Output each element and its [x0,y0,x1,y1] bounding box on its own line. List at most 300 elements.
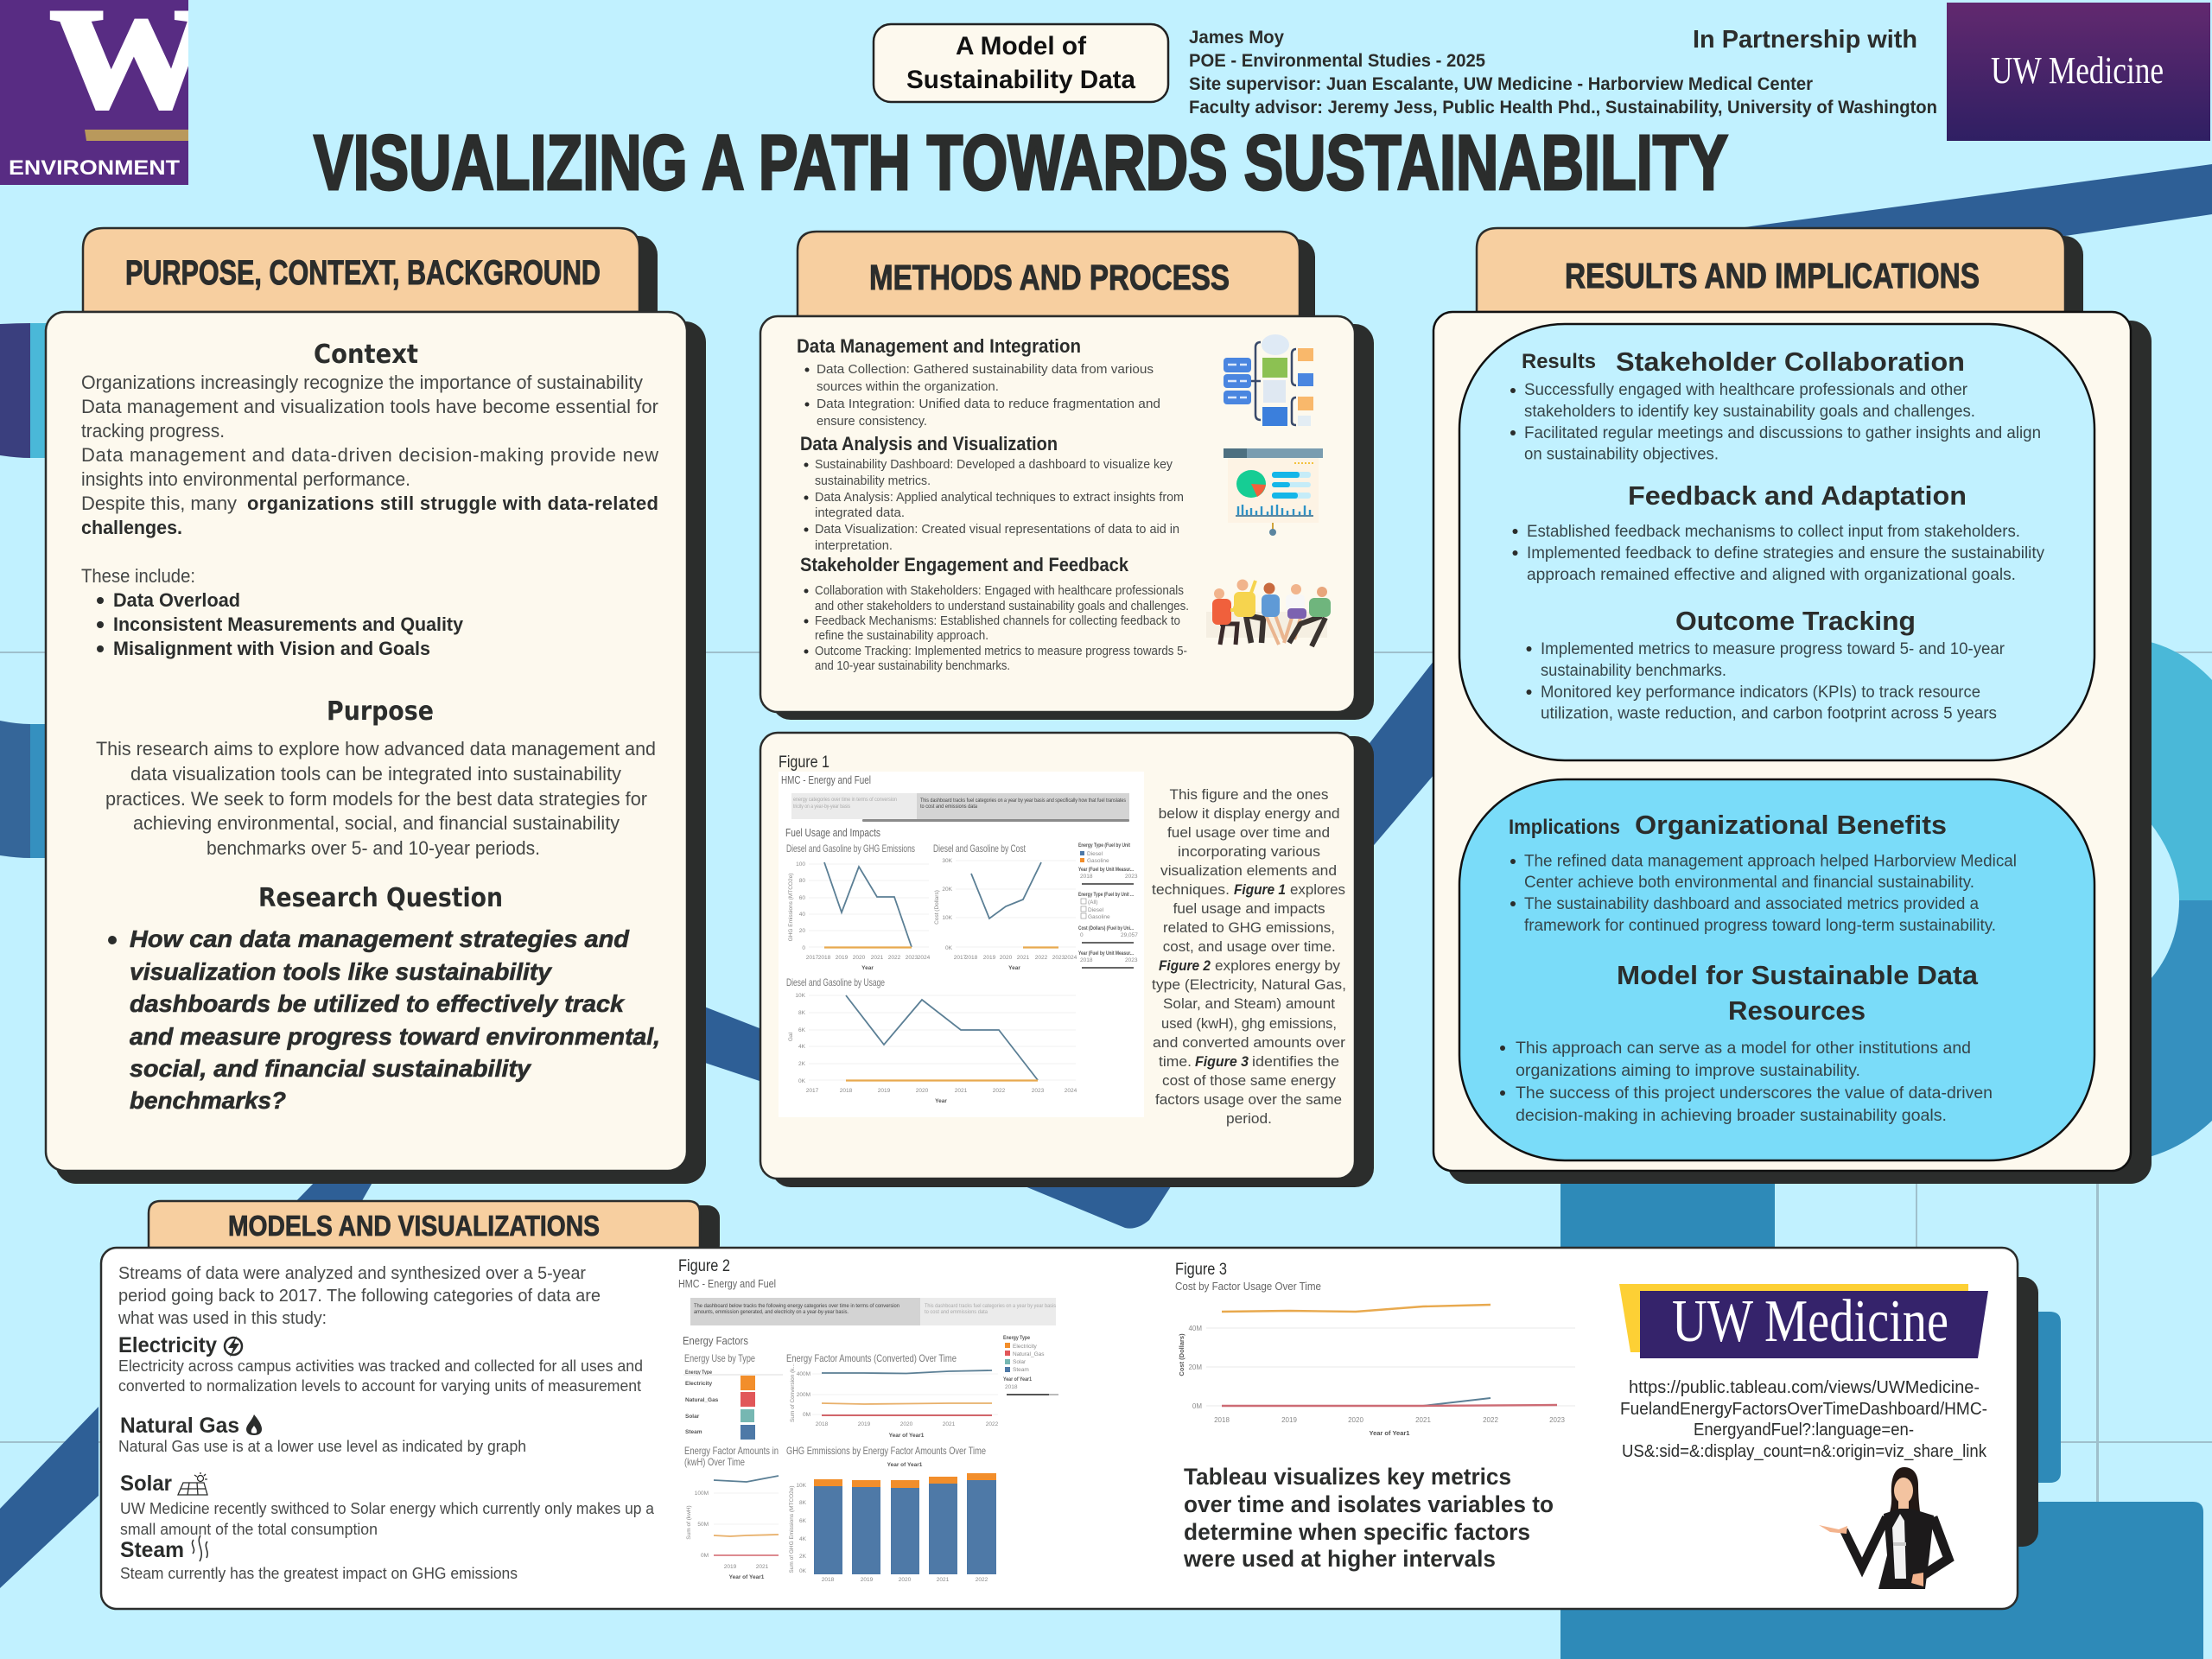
author details: Site supervisor: Juan Escalante, UW Medicine - Harborview Medical Center [1189,74,1813,94]
section: outcome tracking [1526,606,2005,722]
text block: figure description: incorporating various [1178,843,1320,860]
section: model for sustainable data resources: The success of this project underscores the value of data-driven [1516,1084,1993,1103]
chart: figure 2 dashboard: Year of Year1 [1003,1376,1032,1382]
chart: figure 2 dashboard: 2021 [943,1421,956,1427]
section: data analysis: interpretation. [815,538,893,553]
chart: figure 1 dashboard: 10K [942,915,953,921]
section: data analysis: Data Analysis: Applied analytical techniques to extract insights from [815,490,1184,505]
chart: figure 1 dashboard: 2018 [818,955,831,961]
figure 3 label: Figure 3 [1175,1261,1227,1279]
chart: figure 1 dashboard: Diesel and Gasoline by Usage [786,976,885,988]
chart: figure 1 dashboard: Diesel [1088,907,1104,913]
chart: figure 1 dashboard: 2019 [878,1088,891,1094]
chart: figure 2 dashboard: 2021 [937,1577,950,1583]
section: data management: sources within the organization. [817,379,999,394]
chart: figure 2 dashboard: 2019 [858,1421,871,1427]
chart: figure 2 dashboard: 50M [697,1522,709,1528]
section: outcome tracking: utilization, waste reduction, and carbon footprint across 5 years [1541,705,1997,722]
tab heading: models: MODELS AND VISUALIZATIONS [228,1210,600,1242]
chart: figure 1 dashboard: 29,057 [1121,932,1138,938]
chart: figure 1 dashboard: Gal [788,1032,794,1041]
chart: figure 3 cost over time: 2021 [1415,1416,1431,1424]
chart: figure 2 dashboard [678,1277,1058,1583]
section: stakeholder engagement: refine the sustainability approach. [815,628,988,643]
chart: figure 2 dashboard: Solar [1013,1359,1027,1365]
section: outcome tracking: Outcome Tracking [1675,606,1916,636]
chart: figure 1 dashboard: 4K [798,1044,806,1050]
text block: data categories intro: Streams of data were analyzed and synthesized over a 5-year [118,1264,586,1283]
text block: figure description: factors usage over the same [1155,1091,1342,1108]
chart: figure 3 cost over time: 2018 [1214,1416,1230,1424]
section: data analysis [800,433,1184,553]
text block: context: These include: [81,565,195,587]
icon: solar panel [178,1472,207,1495]
tab heading: methods [798,232,1300,316]
chart: figure 1 dashboard: 10K [795,993,806,999]
chart: figure 1 dashboard: 30K [942,858,953,864]
chart: figure 1 dashboard [779,772,1144,1117]
chart: figure 3 cost over time: Cost by Factor Usage Over Time [1175,1280,1321,1293]
chart: figure 2 dashboard: 2018 [822,1577,835,1583]
section: model for sustainable data resources: This approach can serve as a model for other institutions and [1516,1039,1971,1058]
chart: figure 1 dashboard: 80 [799,878,805,884]
chart: figure 2 dashboard: Natural_Gas [685,1397,719,1403]
chart: figure 2 dashboard: Energy Factor Amounts (Converted) Over Time [786,1352,957,1364]
text block: figure description: This figure and the ones [1170,786,1329,803]
text block: research question: dashboards be utilized to effectively track [130,990,625,1017]
chart: figure 2 dashboard: Year of Year1 [729,1574,765,1580]
text block: context [81,372,658,587]
section: outcome tracking: sustainability benchmarks. [1541,662,1726,680]
chart: figure 2 dashboard: 0M [701,1553,709,1559]
chart: figure 1 dashboard: 2023 [1052,955,1065,961]
chart: figure 1 dashboard: 2020 [853,955,866,961]
text block: dashboard link: FuelandEnergyFactorsOverTimeDashboard/HMC- [1620,1400,1987,1419]
chart: figure 3 cost over time: 2022 [1483,1416,1498,1424]
text block: purpose: practices. We seek to form models for the best data strategies for [105,788,647,810]
chart: figure 1 dashboard: energy categories over time in terms of conversion [793,798,897,803]
chart: figure 1 dashboard: 0K [798,1078,806,1084]
section: electricity: Electricity [118,1333,217,1357]
section: natural gas: Natural Gas use is at a lower use level as indicated by graph [118,1438,526,1455]
text block: figure description: used (kwH), ghg emissions, [1161,1015,1337,1032]
subtitle box: Sustainability Data [906,66,1135,94]
text block: data categories intro [118,1264,601,1328]
section: data analysis: Data Analysis and Visualization [800,433,1058,454]
chart: figure 2 dashboard: GHG Emmissions by Energy Factor Amounts Over Time [786,1445,986,1457]
section: stakeholder engagement: and other stakeholders to understand sustainability goals and challenges. [815,599,1189,613]
panel: implications [1459,779,2094,1160]
author details: POE - Environmental Studies - 2025 [1189,51,1485,71]
chart: figure 1 dashboard: 2023 [906,955,918,961]
chart: figure 1 dashboard: 2018 [965,955,978,961]
partnership label: In Partnership with [1693,26,1917,54]
tab heading: methods: METHODS AND PROCESS [869,257,1230,297]
chart: figure 2 dashboard: 2021 [756,1564,769,1570]
section: stakeholder collaboration: on sustainability objectives. [1524,446,1719,463]
chart: figure 2 dashboard: 8K [799,1500,807,1506]
text block: tableau summary [1183,1464,1554,1572]
chart: figure 2 dashboard: Year of Year1 [887,1462,923,1468]
chart: figure 1 dashboard: 2023 [1125,874,1138,880]
text block: figure description: fuel usage and impacts [1173,900,1325,917]
section: solar [120,1471,655,1538]
chart: figure 1 dashboard: to cost and emissions data [920,804,978,810]
chart: figure 1 dashboard: This dashboard tracks fuel categories on a year by year basis and specifically how that fuel translates [920,798,1126,804]
section: data management: Data Collection: Gathered sustainability data from various [817,362,1154,377]
chart: figure 2 dashboard: Energy Type [685,1370,712,1376]
list: data challenges: Misalignment with Vision and Goals [113,638,430,659]
chart: figure 2 dashboard: amounts, emmission generated, and electricity on a year-by-year basis. [694,1310,849,1315]
logo: UW Medicine header: UW Medicine [1991,49,2164,92]
panel: methods and process [760,232,1374,720]
section: solar: Solar [120,1471,172,1496]
subtitle box: A Model of [956,32,1087,60]
chart: figure 2 dashboard: (kwH) Over Time [684,1456,745,1468]
chart: figure 1 dashboard: 2023 [1125,957,1138,963]
section: stakeholder engagement [800,554,1189,673]
logo: UW Environment [0,0,188,185]
text block: figure description: Figure 3 [1195,1053,1249,1070]
heading: purpose: Purpose [327,696,434,727]
chart: figure 1 dashboard: 2024 [918,955,931,961]
panel: figure 1 and description [760,733,1374,1187]
chart: figure 1 dashboard: Diesel [1087,851,1103,857]
icon: flame [246,1414,262,1435]
chart: figure 1 dashboard: Gasoline [1087,858,1109,864]
chart: figure 1 dashboard: 2017 [806,1088,819,1094]
section: solar: UW Medicine recently swithced to Solar energy which currently only makes up a [120,1500,655,1517]
chart: figure 2 dashboard: 2K [799,1554,807,1560]
results label: Results [1522,350,1596,373]
section: model for sustainable data resources: Resources [1728,995,1866,1026]
chart: figure 1 dashboard: 2019 [983,955,996,961]
chart: figure 1 dashboard: Diesel and Gasoline by GHG Emissions [786,842,915,855]
chart: figure 3 cost over time [1175,1280,1575,1437]
chart: figure 1 dashboard: HMC - Energy and Fuel [781,773,871,786]
section: data analysis: Data Visualization: Created visual representations of data to aid in [815,522,1179,537]
text block: figure description: Solar, and Steam) amount [1163,995,1335,1012]
section: stakeholder engagement: and 10-year sustainability benchmarks. [815,658,1010,673]
text block: figure description: related to GHG emissions, [1163,919,1335,936]
text block: context: insights into environmental performance. [81,468,410,490]
text block: dashboard link: https://public.tableau.com/views/UWMedicine- [1629,1378,1980,1397]
figure label: Figure 1 [779,753,830,772]
stacked bars [814,1473,996,1574]
subtitle box [874,24,1168,102]
section: feedback and adaptation [1512,480,2044,584]
section: organizational benefits: Center achieve both environmental and financial sustainability. [1524,874,1974,892]
icon: bolt [225,1336,242,1357]
chart: figure 3 cost over time: 40M [1188,1325,1202,1332]
text block: tableau summary: over time and isolates variables to [1184,1491,1554,1517]
chart: figure 1 dashboard: 2022 [888,955,901,961]
chart: figure 1 dashboard: (All) [1088,899,1098,906]
section: outcome tracking: Monitored key performance indicators (KPIs) to track resource [1541,683,1980,702]
chart: figure 2 dashboard: HMC - Energy and Fuel [678,1277,776,1290]
text block: figure description: type (Electricity, Natural Gas, [1152,976,1346,993]
text block: tableau summary: Tableau visualizes key metrics [1184,1464,1511,1490]
chart: figure 1 dashboard: 2021 [1017,955,1030,961]
chart: figure 1 dashboard: 0K [945,945,953,951]
section: model for sustainable data resources: organizations aiming to improve sustainability. [1516,1062,1860,1080]
section: feedback and adaptation: approach remained effective and aligned with organizational goals. [1527,566,2016,584]
chart: figure 2 dashboard: Solar [685,1414,700,1420]
text block: data categories intro: what was used in this study: [118,1309,327,1328]
chart: figure 2 dashboard: The dashboard below tracks the following energy categories over time in terms of conversion [694,1304,899,1309]
section: feedback and adaptation: Implemented feedback to define strategies and ensure the sustainability [1527,544,2044,563]
chart: figure 2 dashboard: Energy Use by Type [684,1352,755,1364]
text block: context: Despite this, many [81,493,237,514]
tab heading: results [1477,228,2065,312]
section: natural gas: Natural Gas [120,1414,239,1438]
text block: figure description: time. [1159,1053,1192,1070]
section: data analysis: integrated data. [815,505,905,520]
chart: figure 2 dashboard: 2018 [1005,1384,1018,1390]
chart: figure 1 dashboard: 2019 [836,955,849,961]
text block: figure description: explores energy by [1215,957,1341,974]
section: feedback and adaptation: Established feedback mechanisms to collect input from stakeholders. [1527,523,2020,541]
text block: figure description: fuel usage over time and [1167,824,1330,841]
text block: purpose: This research aims to explore how advanced data management and [96,738,656,760]
text block: research question: and measure progress toward environmental, [130,1023,660,1050]
text block: figure description: and converted amounts over [1153,1034,1345,1051]
section: stakeholder engagement: Collaboration with Stakeholders: Engaged with healthcare professionals [815,583,1184,598]
panel: purpose, context, background [46,228,706,1184]
list: data challenges: Inconsistent Measurements and Quality [113,613,464,635]
section: data management: Data Integration: Unified data to reduce fragmentation and [817,397,1160,411]
chart: figure 2 dashboard: Electricity [1013,1344,1038,1350]
text block: figure description: Figure 2 [1159,957,1211,974]
chart: figure 1 dashboard: 2018 [840,1088,853,1094]
text block: context: tracking progress. [81,420,225,442]
chart: figure 1 dashboard: Energy Type (Fuel by Unit ... [1078,892,1134,898]
chart: figure 2 dashboard: 0M [803,1412,810,1418]
chart: figure 3 cost over time: 2020 [1348,1416,1363,1424]
text block: research question: social, and financial sustainability [130,1055,531,1082]
text block: purpose: achieving environmental, social, and financial sustainability [133,812,620,834]
icon: group of people [1206,579,1331,646]
chart: figure 2 dashboard: 0K [799,1568,807,1574]
chart: figure 3 cost over time: 2019 [1281,1416,1297,1424]
chart: figure 1 dashboard: 2021 [871,955,884,961]
chart: figure 2 dashboard: 2020 [899,1577,912,1583]
section: data management: Data Management and Integration [797,335,1081,357]
section: data management [797,335,1160,429]
chart: figure 3 cost over time: Year of Year1 [1370,1429,1409,1437]
chart: figure 1 dashboard: GHG Emissions (MTCO2e) [788,874,794,941]
section: organizational benefits [1510,810,2017,935]
chart: figure 2 dashboard: 2022 [976,1577,988,1583]
section: data analysis: Sustainability Dashboard: Developed a dashboard to visualize key [815,457,1173,472]
logo: UW Medicine header [1947,3,2210,141]
panel: models and visualizations [101,1201,2038,1609]
chart: figure 1 dashboard: 0 [1080,932,1084,938]
section: model for sustainable data resources: decision-making in achieving broader sustainability goals. [1516,1107,1947,1125]
text block: figure description: period. [1226,1110,1272,1127]
chart: figure 1 dashboard: 40 [799,912,805,918]
section: model for sustainable data resources [1500,960,1993,1125]
implications label: Implications [1509,816,1620,839]
chart: figure 2 dashboard: Steam [685,1429,702,1435]
chart: figure 1 dashboard: 60 [799,895,805,901]
chart: figure 2 dashboard: 200M [797,1392,810,1398]
text block: data categories intro: period going back to 2017. The following categories of data are [118,1287,601,1306]
chart: figure 1 dashboard: Year [861,965,874,971]
chart: figure 1 dashboard: Cost (Dollars) [934,890,940,925]
chart: figure 2 dashboard: 2019 [861,1577,874,1583]
icon: dashboard [1224,448,1323,536]
chart: figure 2 dashboard: Energy Factors [683,1334,748,1347]
text block: figure description: below it display energy and [1159,805,1340,822]
icon: data hierarchy [1224,334,1313,426]
heading: context: Context [314,340,418,370]
chart: figure 1 dashboard: Fuel Usage and Impacts [785,826,880,839]
text block: figure description: cost, and usage over time. [1163,938,1336,955]
section: steam: Steam currently has the greatest impact on GHG emissions [120,1565,518,1582]
chart: figure 2 dashboard: 2020 [900,1421,913,1427]
text block: dashboard link: EnergyandFuel?:language=en- [1694,1421,1914,1440]
chart: figure 1 dashboard: 2017 [954,955,967,961]
chart: figure 1 dashboard: 2020 [1000,955,1013,961]
panel: results [1459,324,2094,760]
section: organizational benefits: Organizational Benefits [1635,810,1947,840]
section: stakeholder collaboration: Successfully engaged with healthcare professionals and other [1524,381,1968,399]
section: natural gas [118,1414,526,1455]
text block: context: challenges. [81,517,182,538]
chart: figure 1 dashboard: Year (Fuel by Unit Measur... [1078,950,1134,957]
tab heading: models [149,1201,700,1248]
text block: figure description: cost of those same energy [1162,1072,1336,1089]
chart: figure 1 dashboard: tricity on a year-by-year basis [793,804,850,810]
chart: figure 2 dashboard: Sum of GHG Emissions (MTCO2e) [789,1485,795,1573]
text block: figure description: techniques. [1152,881,1230,898]
chart: figure 2 dashboard: Steam [1013,1367,1029,1373]
section: organizational benefits: The refined data management approach helped Harborview Medical [1524,853,2017,871]
section: stakeholder engagement: Outcome Tracking: Implemented metrics to measure progress towards 5- [815,644,1187,658]
chart: figure 1 dashboard: Year [1008,965,1020,971]
text block: figure description: identifies the [1252,1053,1339,1070]
text block: figure description: Figure 1 [1234,881,1286,898]
text block: context: Data management and data-driven decision-making provide new [81,444,658,466]
section: stakeholder collaboration: Stakeholder Collaboration [1616,346,1965,377]
chart: figure 2 dashboard: 400M [797,1371,810,1377]
chart: figure 1 dashboard: 2023 [1032,1088,1045,1094]
tab heading: purpose: PURPOSE, CONTEXT, BACKGROUND [125,254,601,292]
text block: purpose [96,738,656,859]
text block: context: Data management and visualization tools have become essential for [81,396,658,417]
list: data challenges [97,589,464,659]
section: stakeholder collaboration: stakeholders to identify key sustainability goals and challenges. [1524,403,1975,421]
text block: purpose: data visualization tools can be integrated into sustainability [130,763,621,785]
section: data management: ensure consistency. [817,414,927,429]
chart: figure 1 dashboard: 2017 [806,955,819,961]
chart: figure 1 dashboard: 8K [798,1010,806,1016]
chart: figure 2 dashboard: This dashboard tracks fuel categories on a year by year basis [925,1304,1056,1309]
author details [1189,28,1937,118]
section: organizational benefits: framework for continued progress toward long-term sustainability. [1524,917,1996,935]
chart: figure 2 dashboard: 100M [695,1491,709,1497]
section: outcome tracking: Implemented metrics to measure progress toward 5- and 10-year [1541,640,2005,658]
section: model for sustainable data resources: Model for Sustainable Data [1617,960,1979,990]
chart: figure 1 dashboard: Year (Fuel by Unit Measur... [1078,867,1134,873]
chart: figure 2 dashboard: 10K [796,1483,807,1489]
section: data analysis: sustainability metrics. [815,474,931,488]
chart: figure 1 dashboard: 2022 [993,1088,1006,1094]
figure 2 label: Figure 2 [678,1257,730,1275]
chart: figure 1 dashboard: 2024 [1065,955,1077,961]
icon: steam [192,1535,207,1561]
chart: figure 2 dashboard: Energy Factor Amounts in [684,1445,779,1457]
chart: figure 2 dashboard: Sum of Conversion (k... [790,1363,796,1422]
chart: figure 3 cost over time: Cost (Dollars) [1178,1333,1185,1376]
chart: figure 2 dashboard: 2018 [816,1421,829,1427]
text block: dashboard link [1620,1378,1987,1461]
chart: figure 1 dashboard: Cost (Dollars) (Fuel by Uni... [1078,925,1134,931]
chart: figure 2 dashboard: to cost and emmissions data [925,1310,988,1315]
chart: figure 1 dashboard: Year [935,1098,947,1104]
chart: figure 1 dashboard: Energy Type (Fuel by Unit [1078,842,1131,849]
chart: figure 1 dashboard: Diesel and Gasoline by Cost [933,842,1026,855]
illustration: presenter woman [1819,1467,1948,1589]
chart: figure 2 dashboard: 2022 [986,1421,999,1427]
text block: figure description: visualization elements and [1160,862,1337,879]
chart: figure 1 dashboard: 0 [802,945,805,951]
chart: figure 2 dashboard: Energy Type [1003,1335,1030,1341]
heading: research question: Research Question [258,883,503,913]
chart: figure 2 dashboard: 2019 [724,1564,737,1570]
list: data challenges: Data Overload [113,589,240,611]
chart: figure 3 cost over time: 20M [1188,1363,1202,1371]
logo: UW Environment: ENVIRONMENT [9,156,180,180]
section: steam [120,1535,518,1582]
section: feedback and adaptation: Feedback and Adaptation [1628,480,1967,511]
section: solar: small amount of the total consumption [120,1521,378,1538]
text block: research question: benchmarks? [130,1087,286,1114]
chart: figure 2 dashboard: Sum of (kwH) [686,1505,692,1540]
section: stakeholder engagement: Feedback Mechanisms: Established channels for collecting feedback to [815,613,1180,628]
text block: tableau summary: determine when specific factors [1184,1519,1530,1545]
section: stakeholder engagement: Stakeholder Engagement and Feedback [800,554,1129,575]
text block: context: Organizations increasingly recognize the importance of sustainability [81,372,643,393]
text block: research question: How can data management strategies and [130,925,630,952]
logo: UW Medicine banner: UW Medicine [1672,1288,1948,1355]
author details: James Moy [1189,28,1284,48]
text block: purpose: benchmarks over 5- and 10-year periods. [207,837,540,859]
text block: context: organizations still struggle with data-related [247,493,658,514]
chart: figure 1 dashboard: 2024 [1065,1088,1077,1094]
tab heading: purpose [83,228,639,312]
section: electricity: converted to normalization levels to account for varying units of measurement [118,1377,641,1395]
text block: tableau summary: were used at higher intervals [1183,1546,1496,1572]
chart: figure 1 dashboard: 2022 [1035,955,1048,961]
text block: figure description [1152,786,1346,1127]
chart: figure 1 dashboard: 2018 [1080,874,1093,880]
text block: figure description: explores [1290,881,1345,898]
chart: figure 1 dashboard: 100 [796,861,805,868]
section: electricity [118,1333,643,1395]
chart: figure 1 dashboard: 2020 [916,1088,929,1094]
section: stakeholder collaboration [1510,346,2041,463]
tab heading: results: RESULTS AND IMPLICATIONS [1565,256,1980,296]
chart: figure 2 dashboard: Natural_Gas [1013,1351,1045,1357]
chart: figure 2 dashboard: Year of Year1 [889,1433,925,1439]
chart: figure 1 dashboard: 2021 [955,1088,968,1094]
chart: figure 2 dashboard: 4K [799,1536,807,1542]
section: stakeholder collaboration: Facilitated regular meetings and discussions to gather insights and align [1524,424,2041,442]
section: steam: Steam [120,1538,184,1562]
chart: figure 1 dashboard: 6K [798,1027,806,1033]
